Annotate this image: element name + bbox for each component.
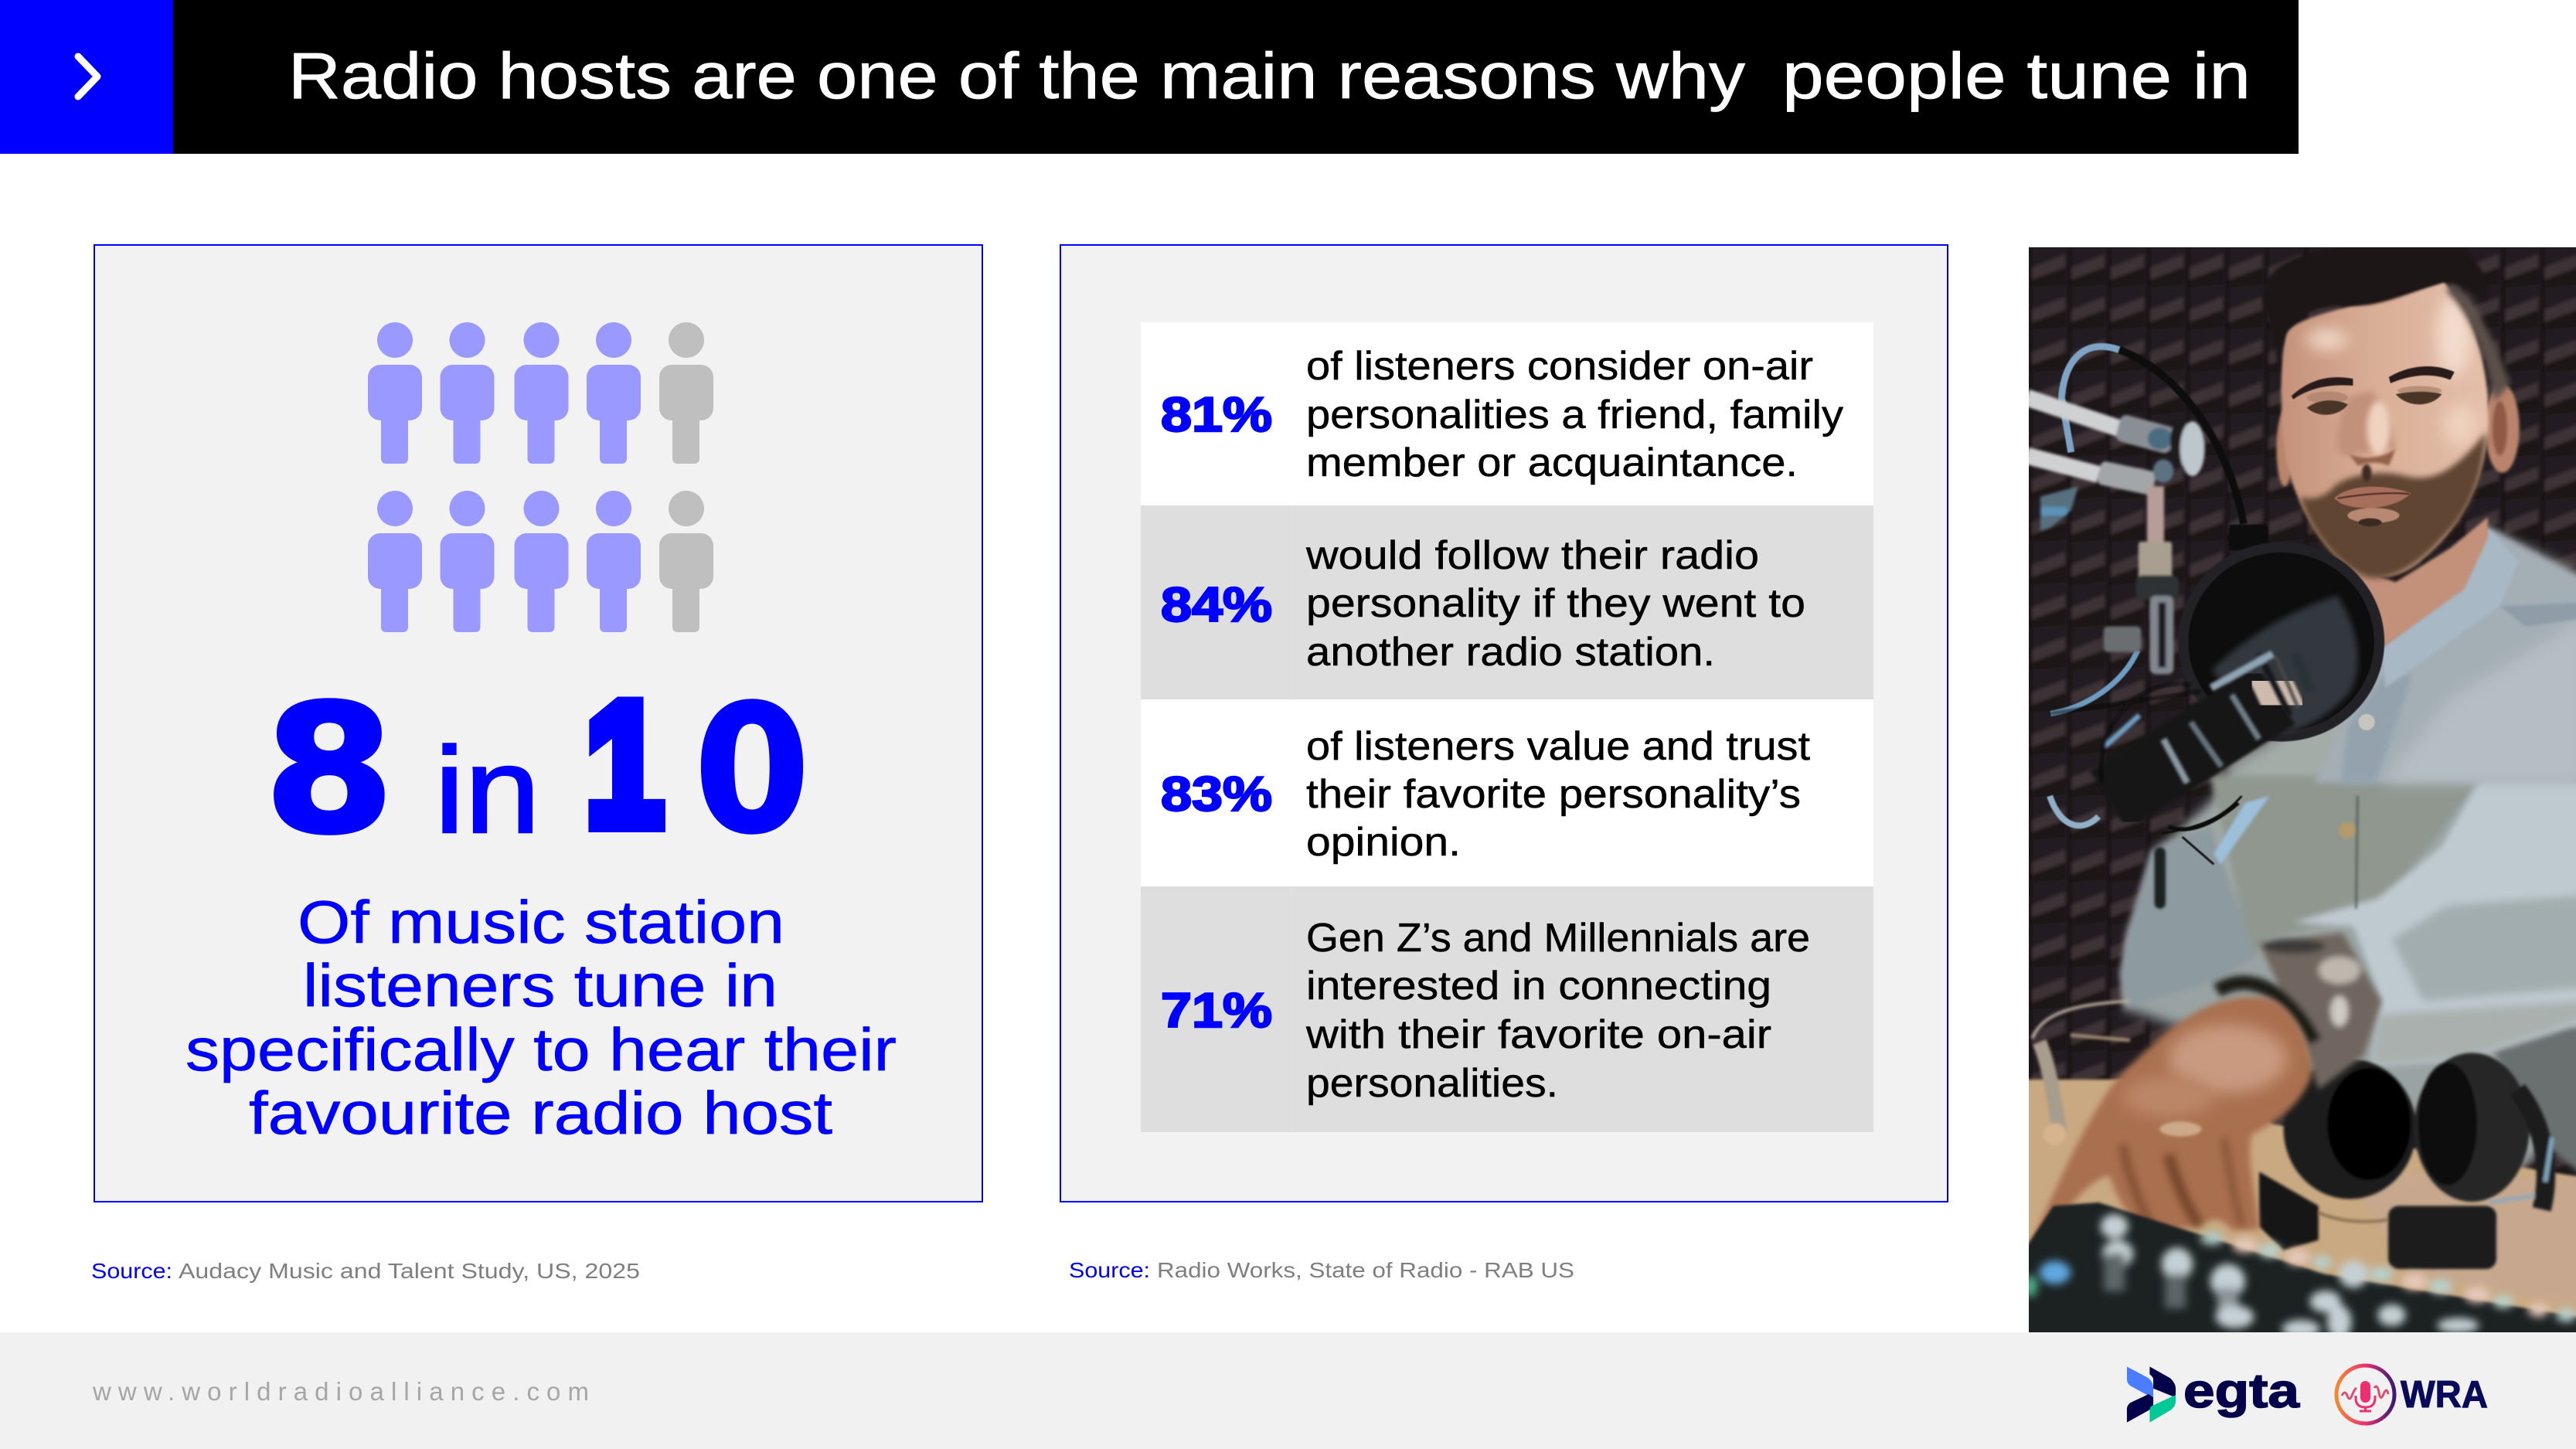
statistic description: favourite radio host: [249, 1079, 832, 1147]
big number: 8 in 10: in: [434, 723, 540, 859]
statistic description: specifically to hear their: [185, 1015, 897, 1083]
row: 71%: 71%: [1161, 984, 1272, 1038]
ear: [2276, 384, 2520, 486]
row: 71%: interested in connecting: [1306, 964, 1771, 1009]
row: 83%: of listeners value and trust: [1306, 724, 1811, 769]
shirt: [2314, 527, 2576, 783]
row: 71%: personalities.: [1306, 1061, 1558, 1106]
source note: right panel: Source:: [1069, 1258, 1150, 1282]
logo: egta: [2127, 1365, 2300, 1423]
microphone: [2050, 654, 2310, 801]
big number: 8 in 10: [264, 666, 810, 872]
row: 83%: opinion.: [1306, 820, 1461, 865]
big number: 8 in 10: 0: [694, 667, 810, 872]
title: [288, 39, 2251, 112]
watch and bracelet: [2217, 933, 2381, 1090]
logo: egta: egta: [2183, 1365, 2300, 1418]
nose shadow: [2348, 449, 2396, 466]
microphone stand: [2026, 397, 2205, 674]
panel: on-air personality statistics: [1060, 245, 1948, 1202]
shirt base layer: [2122, 528, 2576, 1176]
row: 71%: with their favorite on-air: [1305, 1012, 1771, 1057]
row: 71%: Gen Z’s and Millennials are: [1306, 916, 1810, 961]
website url: www.worldradioalliance.com: [92, 1377, 589, 1406]
row: 81%: of listeners consider on-air: [1306, 344, 1813, 389]
lower photo area: [2022, 755, 2576, 1342]
pop filter: [2183, 525, 2379, 736]
row: 84%: another radio station.: [1306, 630, 1715, 675]
face: [2281, 281, 2489, 577]
row: 71%: [1141, 886, 1873, 1132]
statistic description: [185, 888, 897, 1147]
row: 83%: their favorite personality’s: [1306, 772, 1801, 817]
source note: left panel: Audacy Music and Talent Study, US, 2025: [179, 1259, 640, 1283]
gooseneck and cable: [2050, 346, 2244, 713]
row: 84%: would follow their radio: [1305, 533, 1759, 578]
row: 83%: [1141, 699, 1873, 886]
row: 84%: 84%: [1161, 578, 1272, 632]
big number: 8 in 10: 1: [586, 666, 663, 862]
icon: pictogram of ten people, eight highlighted: [368, 322, 713, 632]
row: 84%: personality if they went to: [1306, 581, 1805, 626]
statistic description: Of music station: [298, 888, 784, 956]
source note: right panel: Radio Works, State of Radio - RAB US: [1157, 1258, 1574, 1282]
mouth: [2334, 487, 2411, 526]
logo: WRA: [2336, 1366, 2488, 1423]
hand: [2025, 997, 2312, 1253]
row: 81%: 81%: [1161, 388, 1272, 442]
header bar: [0, 0, 2299, 154]
title: people tune in: [1782, 39, 2251, 112]
logo: WRA: WRA: [2401, 1374, 2488, 1416]
big number: 8 in 10: 8: [264, 667, 394, 872]
row: 81%: [1141, 322, 1873, 505]
neck: [2348, 517, 2488, 647]
hair: [2264, 240, 2510, 411]
title: Radio hosts are one of the main reasons why: [288, 39, 1745, 112]
headphones: [2259, 1053, 2552, 1269]
photo: radio host at microphone: [2029, 247, 2576, 1332]
upper photo area: [2026, 240, 2576, 801]
panel: 8 in 10 statistic: [94, 245, 982, 1202]
row: 81%: personalities a friend, family: [1306, 393, 1843, 437]
icon: chevron arrow: [78, 56, 97, 97]
microphone cradle and cables: [2050, 796, 2241, 864]
row: 83%: 83%: [1161, 767, 1272, 821]
header arrow tab: [0, 0, 173, 154]
footer bar: [0, 1332, 2576, 1449]
row: 81%: member or acquaintance.: [1306, 440, 1798, 485]
facial hair: [2300, 432, 2486, 578]
statistic description: listeners tune in: [303, 951, 778, 1019]
row: 84%: [1141, 505, 1873, 699]
glass: [2033, 1001, 2130, 1145]
source note: left panel: Source:: [91, 1259, 172, 1283]
mixing desk: [2022, 1202, 2576, 1342]
eyes and brows: [2292, 366, 2455, 415]
